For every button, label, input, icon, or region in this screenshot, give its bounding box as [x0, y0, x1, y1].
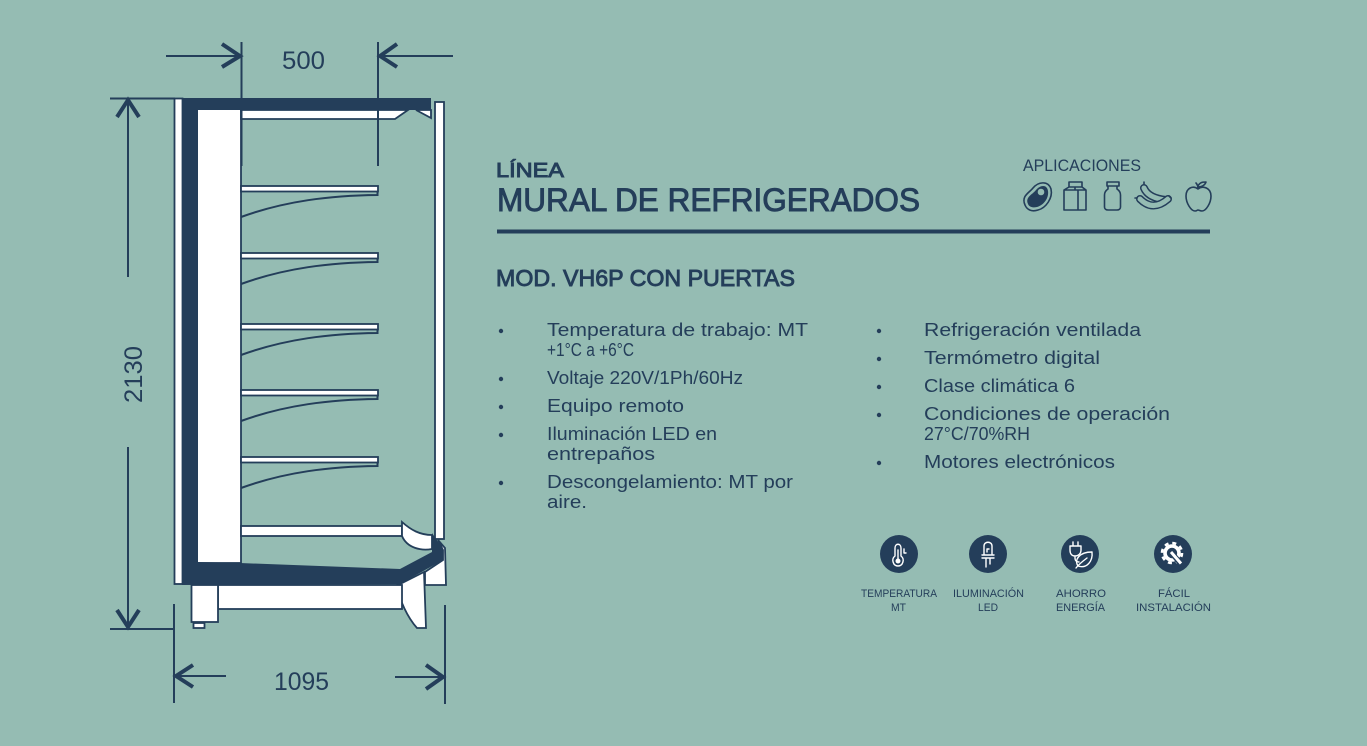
specifications list, right column: Refrigeración ventilada [924, 319, 1142, 340]
dimension: 1095 width: 1095 [274, 668, 329, 696]
shelf 5 [241, 457, 378, 488]
feature: ahorro energía: AHORRO [1056, 588, 1106, 600]
foot block [192, 585, 218, 622]
canopy white tip [416, 110, 431, 118]
icon: bottle [1104, 182, 1120, 210]
feature: temperatura MT: MT [891, 602, 906, 614]
specifications list, right column: Condiciones de operación [924, 403, 1170, 424]
specifications list, left column: aire. [547, 491, 587, 512]
front kick white [425, 540, 446, 585]
dimension: 2130 height: 2130 [120, 346, 148, 403]
dimension: 2130 height [110, 98, 175, 629]
shelf 4 [241, 390, 378, 421]
bottom deck shelf [241, 526, 402, 536]
feature: temperatura MT: TEMPERATURA [861, 588, 938, 600]
model heading: MOD. VH6P CON PUERTAS [496, 265, 795, 291]
specifications list, right column: Clase climática 6 [924, 375, 1075, 396]
front air return curve [402, 522, 432, 550]
specifications list, left column: Temperatura de trabajo: MT [547, 319, 808, 340]
specifications list, left column: +1°C a +6°C [547, 339, 634, 360]
specifications list, left column [499, 319, 808, 512]
specifications list, left column: Voltaje 220V/1Ph/60Hz [547, 367, 743, 388]
specifications list, left column: Equipo remoto [547, 395, 684, 416]
specifications list, right column [877, 319, 1170, 472]
shelf 1 [241, 186, 378, 217]
feature: ahorro energía: ENERGÍA [1056, 601, 1106, 614]
feature: iluminación LED: LED [978, 602, 998, 614]
feature: iluminación LED: ILUMINACIÓN [953, 587, 1024, 600]
icon: milk carton [1064, 182, 1086, 210]
shelf 2 [241, 253, 378, 284]
navy structural shell [182, 98, 443, 585]
feature: fácil instalación [1136, 535, 1211, 614]
icon: sausages [1135, 182, 1171, 206]
white insulated back panel [197, 109, 241, 563]
specifications list, left column: entrepaños [547, 443, 655, 464]
front leg [397, 572, 426, 628]
feature: fácil instalación: FÁCIL [1158, 587, 1190, 600]
feature: iluminación LED [953, 535, 1024, 614]
feature: ahorro energía [1056, 535, 1106, 614]
shelf 3 [241, 324, 378, 355]
feature: fácil instalación: INSTALACIÓN [1136, 601, 1211, 614]
specifications list, right column: 27°C/70%RH [924, 423, 1030, 444]
dimension: 500 width [166, 42, 453, 166]
specifications list, right column: Termómetro digital [924, 347, 1100, 368]
base [218, 585, 402, 609]
dimension: 1095 width [174, 604, 445, 704]
specifications list, left column: Descongelamiento: MT por [547, 471, 793, 492]
shelves [241, 186, 378, 488]
technical drawing: refrigerated display case side view [174, 98, 446, 628]
specifications list, right column: Motores electrónicos [924, 451, 1115, 472]
specifications list, left column: Iluminación LED en [547, 423, 717, 444]
dimension: 500 width: 500 [282, 47, 325, 75]
applications label: APLICACIONES [1023, 156, 1141, 175]
foot pad [194, 623, 204, 628]
title divider rule [497, 230, 1210, 234]
icon: meat [1024, 183, 1051, 211]
heading: LÍNEA: LÍNEA [496, 159, 565, 182]
glass door [435, 102, 444, 539]
icon: apple [1186, 182, 1211, 211]
heading: MURAL DE REFRIGERADOS: MURAL DE REFRIGERADOS [497, 182, 920, 218]
left white back strip [174, 98, 182, 584]
top canopy white underside [241, 110, 408, 119]
feature: temperatura MT [861, 535, 938, 614]
